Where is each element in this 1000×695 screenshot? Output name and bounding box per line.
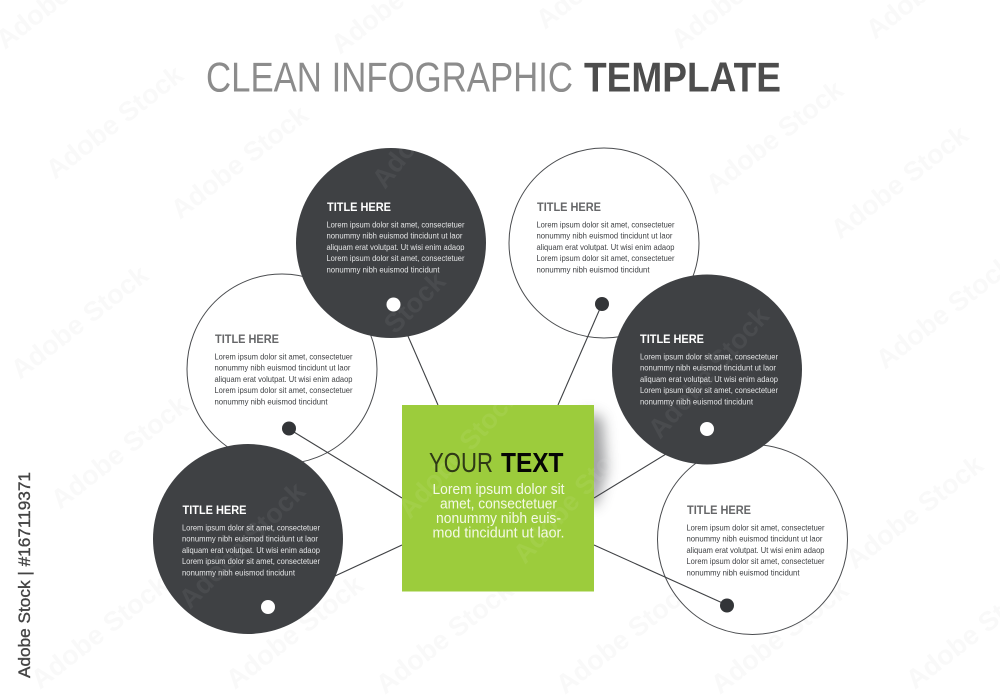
square shadow bbox=[585, 412, 606, 505]
text: Adobe Stock bbox=[45, 389, 195, 515]
text: Adobe Stock bbox=[825, 119, 975, 245]
text block: right dark circle: TITLE HERE bbox=[640, 334, 704, 346]
title: CLEAN INFOGRAPHIC bbox=[206, 54, 573, 100]
text block: top dark circle: nonummy nibh euismod tincidunt bbox=[326, 264, 440, 274]
text: Adobe Stock bbox=[700, 74, 850, 200]
text block: top right circle: Lorem ipsum dolor sit amet, consectetuer bbox=[536, 253, 675, 263]
text: Adobe Stock bbox=[25, 569, 175, 695]
text block: bottom left dark circle: aliquam erat volutpat. Ut wisi enim adaop bbox=[182, 545, 320, 555]
text block: bottom right circle: nonummy nibh euismod tincidunt ut laor bbox=[686, 534, 823, 544]
circle: right dark bbox=[612, 274, 802, 464]
text block: bottom left dark circle: nonummy nibh euismod tincidunt bbox=[182, 567, 296, 577]
text block: bottom right circle: Lorem ipsum dolor sit amet, consectetuer bbox=[686, 522, 825, 532]
circle: bottom left dark bbox=[153, 444, 343, 634]
text block: right dark circle: Lorem ipsum dolor sit amet, consectetuer bbox=[640, 385, 778, 395]
connector lines bbox=[268, 304, 727, 607]
text: Adobe Stock bbox=[5, 259, 155, 385]
text block: left circle: Lorem ipsum dolor sit amet, consectetuer bbox=[214, 385, 353, 395]
text block: bottom right circle: nonummy nibh euismod tincidunt bbox=[686, 567, 800, 577]
text block: bottom right circle bbox=[686, 505, 825, 577]
dot: left circle bbox=[282, 422, 296, 436]
text block: left circle: aliquam erat volutpat. Ut wisi enim adaop bbox=[214, 374, 353, 384]
text block: right dark circle: nonummy nibh euismod tincidunt bbox=[640, 396, 754, 406]
text block: bottom right circle: TITLE HERE bbox=[687, 505, 751, 517]
text block: top dark circle: TITLE HERE bbox=[327, 202, 391, 214]
text block: top dark circle: Lorem ipsum dolor sit amet, consectetuer bbox=[326, 220, 465, 230]
text block: left circle: TITLE HERE bbox=[215, 334, 279, 346]
text block: top right circle: aliquam erat volutpat. Ut wisi enim adaop bbox=[536, 242, 675, 252]
text block: top right circle: TITLE HERE bbox=[537, 202, 601, 214]
center panel: Adobe Stock bbox=[392, 381, 526, 524]
panel body text bbox=[432, 482, 564, 542]
text block: top dark circle: nonummy nibh euismod tincidunt ut laor bbox=[326, 231, 463, 241]
dot: right dark circle bbox=[700, 422, 714, 436]
text block: right dark circle: aliquam erat volutpat. Ut wisi enim adaop bbox=[640, 374, 778, 384]
text: Adobe Stock bbox=[173, 476, 312, 614]
text: Stock bbox=[378, 265, 452, 339]
text: Adobe bbox=[366, 109, 441, 194]
text block: top dark circle: Lorem ipsum dolor sit amet, consectetuer bbox=[326, 253, 465, 263]
center panel: Adobe Stock bbox=[507, 426, 641, 569]
text: Adobe Stock bbox=[642, 301, 776, 444]
text block: top right circle: nonummy nibh euismod tincidunt bbox=[536, 264, 650, 274]
text block: right dark circle: nonummy nibh euismod tincidunt ut laor bbox=[640, 363, 776, 373]
text block: bottom right circle: aliquam erat volutpat. Ut wisi enim adaop bbox=[686, 545, 825, 555]
title: TEMPLATE bbox=[584, 54, 781, 100]
text block: top dark circle: aliquam erat volutpat. Ut wisi enim adaop bbox=[326, 242, 465, 252]
circle: bottom right outline bbox=[658, 444, 848, 634]
dot: top right circle bbox=[595, 297, 609, 311]
text block: top right circle: Lorem ipsum dolor sit amet, consectetuer bbox=[536, 220, 675, 230]
text block: bottom left dark circle: Lorem ipsum dolor sit amet, consectetuer bbox=[182, 556, 320, 566]
circle: top dark bbox=[296, 148, 486, 338]
panel heading: YOUR bbox=[429, 447, 493, 478]
text block: bottom left dark circle: TITLE HERE bbox=[182, 505, 247, 517]
text block: bottom left dark circle: nonummy nibh euismod tincidunt ut laor bbox=[182, 534, 318, 544]
circle: top right outline bbox=[509, 148, 699, 338]
center panel bbox=[392, 381, 641, 592]
text block: left circle: Lorem ipsum dolor sit amet, consectetuer bbox=[214, 352, 353, 362]
panel body text: mod tincidunt ut laor. bbox=[432, 526, 564, 542]
text block: left circle: nonummy nibh euismod tincidunt bbox=[214, 396, 328, 406]
panel body text: nonummy nibh euis- bbox=[436, 511, 561, 527]
text block: right dark circle: Lorem ipsum dolor sit amet, consectetuer bbox=[640, 352, 778, 362]
panel body text: Lorem ipsum dolor sit bbox=[432, 482, 564, 498]
text: Adobe Stock bbox=[165, 99, 315, 225]
text block: top right circle bbox=[536, 202, 675, 274]
text: Adobe Stock bbox=[220, 569, 370, 695]
text block: left circle bbox=[214, 334, 353, 406]
text block: top dark circle bbox=[326, 202, 465, 274]
panel body text: amet, consectetuer bbox=[440, 496, 557, 512]
panel heading bbox=[429, 447, 564, 478]
text block: right dark circle bbox=[640, 334, 778, 406]
text block: top right circle: nonummy nibh euismod tincidunt ut laor bbox=[536, 231, 673, 241]
circle: left outline bbox=[187, 274, 377, 464]
text: Adobe Stock bbox=[840, 449, 990, 575]
text block: bottom left dark circle bbox=[182, 505, 320, 577]
text block: bottom left dark circle: Lorem ipsum dolor sit amet, consectetuer bbox=[182, 522, 320, 532]
dot: top dark circle bbox=[386, 298, 400, 312]
text block: left circle: nonummy nibh euismod tincidunt ut laor bbox=[214, 363, 351, 373]
text: Adobe Stock bbox=[40, 59, 190, 185]
panel heading: TEXT bbox=[501, 447, 564, 478]
text block: bottom right circle: Lorem ipsum dolor sit amet, consectetuer bbox=[686, 556, 825, 566]
dot: bottom right circle bbox=[720, 598, 734, 612]
dot: bottom left circle bbox=[261, 600, 275, 614]
side credit: Adobe Stock | #167119371 bbox=[15, 472, 34, 678]
